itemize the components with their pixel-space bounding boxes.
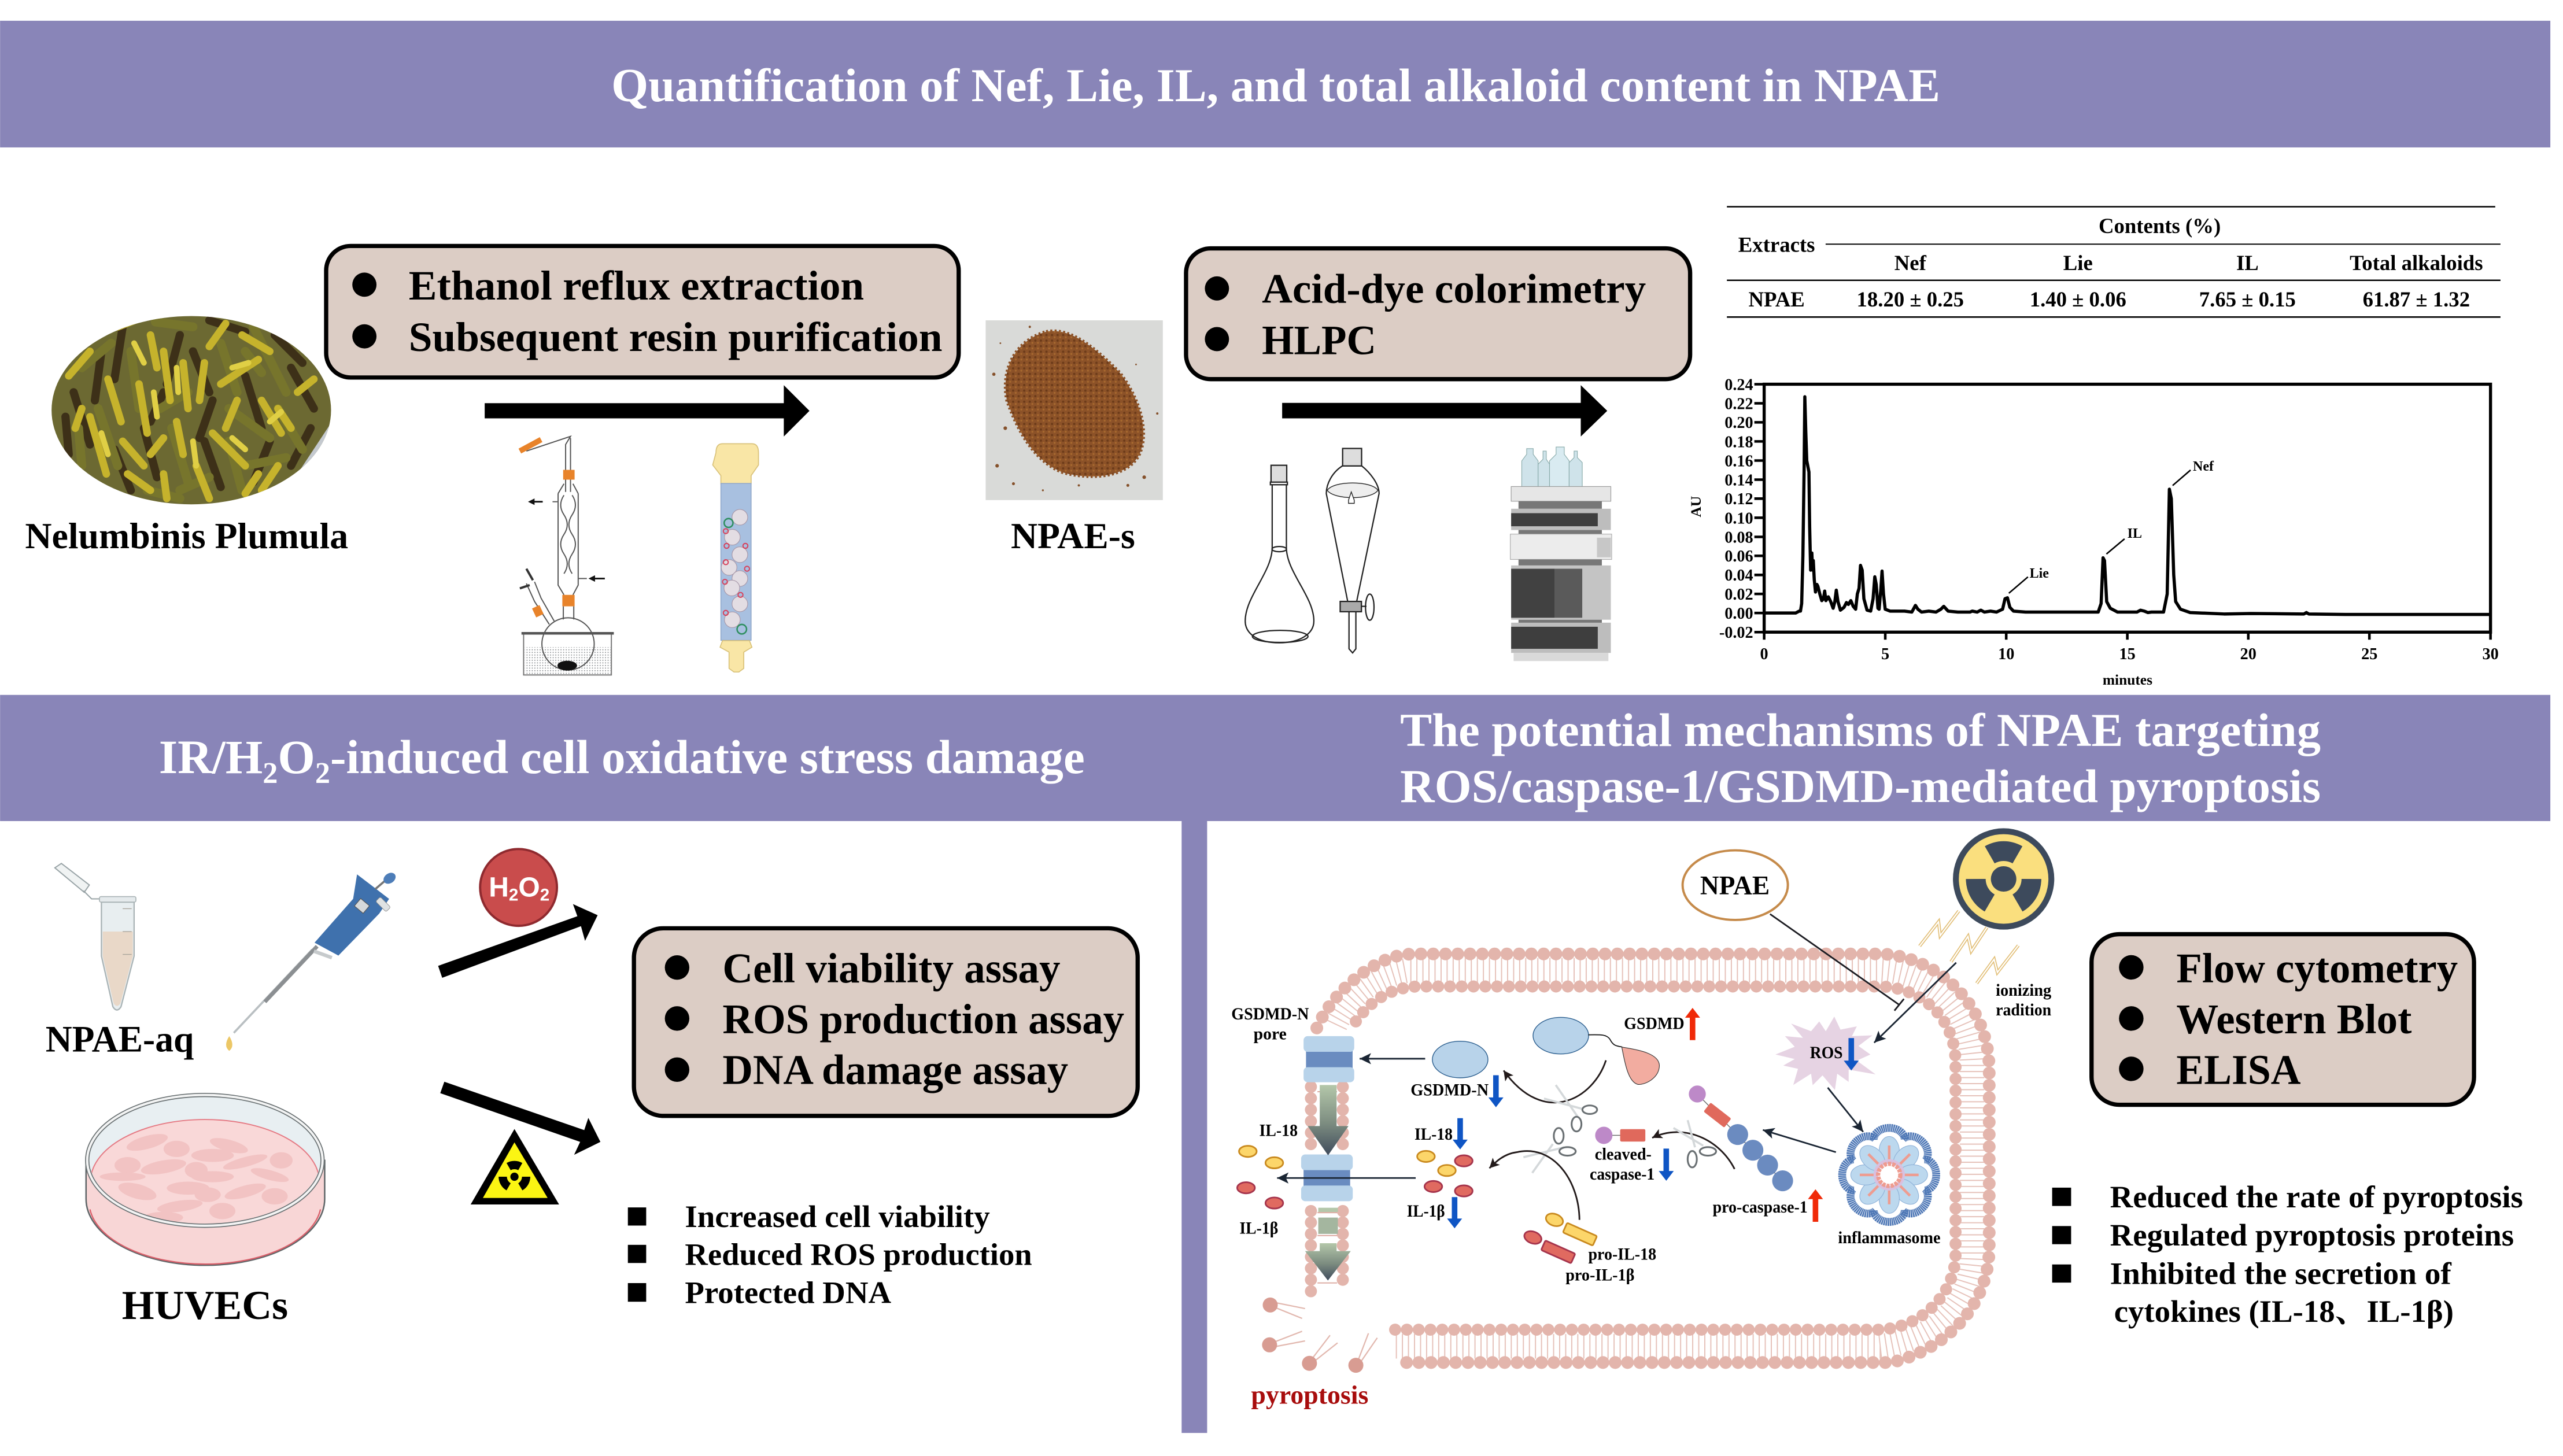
chart: HPLC chromatogram: 0.00 [1724, 605, 1753, 623]
header: cell oxidative stress and mechanisms: 2 [263, 756, 278, 790]
panel: extraction methods: Subsequent resin purification [409, 314, 943, 360]
text block: oxidative stress results: Increased cell viability [685, 1199, 990, 1234]
arrow: radiation to ROS [1874, 963, 1956, 1043]
chart: HPLC chromatogram: 0 [1760, 645, 1768, 663]
arrow: cleavage of GSDMD [1504, 1060, 1606, 1103]
cell membrane [1311, 954, 1989, 1362]
chart: HPLC chromatogram: 0.20 [1724, 414, 1753, 432]
chart: HPLC chromatogram: 20 [2240, 645, 2257, 663]
chart: HPLC chromatogram: 10 [1998, 645, 2014, 663]
chart: HPLC chromatogram: Lie [2030, 566, 2049, 581]
text block: oxidative stress results [628, 1199, 1032, 1310]
divider bar [1181, 821, 1207, 1433]
panel: analysis methods: HLPC [1262, 317, 1376, 363]
GSDMD-N pore upper [1303, 1036, 1354, 1082]
text block: oxidative stress results: Reduced ROS production [685, 1237, 1032, 1272]
label: GSDMD-N pore: pore [1254, 1025, 1287, 1043]
chart: HPLC chromatogram: 0.04 [1724, 567, 1753, 585]
inflammasome [1842, 1128, 1936, 1222]
icon: H2O2 [480, 849, 557, 926]
chart: HPLC chromatogram: 0.18 [1724, 433, 1753, 451]
label: IL-18 with down arrow [1415, 1118, 1468, 1150]
chart: HPLC chromatogram: AU [1687, 496, 1704, 518]
arrow: ROS to inflammasome [1828, 1088, 1863, 1132]
icon: microtube NPAE-aq [55, 863, 136, 1010]
panel: assays [634, 928, 1138, 1116]
label: ionizing radition: ionizing [1996, 981, 2051, 1000]
text block: mechanism results: cytokines (IL-18、IL-1β) [2114, 1294, 2454, 1329]
arrow: powder to analysis [1282, 385, 1607, 437]
arrow: extraction to powder [485, 385, 810, 437]
diagram: pyroptosis mechanism [1231, 828, 2054, 1409]
ROS burst [1775, 1017, 1875, 1090]
chart: HPLC chromatogram: 0.22 [1724, 395, 1753, 413]
label: IL-1β with down arrow: IL-1β [1407, 1202, 1445, 1221]
cytokines inside [1417, 1151, 1472, 1196]
arrow: cytokine release [1277, 1177, 1416, 1178]
arrow: H2O2 to assays [438, 904, 597, 978]
chart: HPLC chromatogram: 0.10 [1724, 509, 1753, 527]
table: contents: Lie [2063, 251, 2093, 275]
table: contents: Extracts [1738, 232, 1815, 256]
label: Nelumbinis Plumula: Nelumbinis Plumula [25, 515, 348, 556]
header: cell oxidative stress and mechanisms: -induced cell oxidative stress damage [330, 730, 1085, 784]
chart: HPLC chromatogram: 0.14 [1724, 471, 1753, 489]
cytokines outside [1237, 1146, 1283, 1209]
text block: oxidative stress results: Protected DNA [685, 1276, 891, 1310]
text block: mechanism results: Regulated pyroptosis proteins [2110, 1218, 2514, 1252]
table: contents: Total alkaloids [2350, 251, 2483, 275]
label: cleaved-caspase-1 with down arrow: caspase-1 [1590, 1165, 1654, 1184]
chart: HPLC chromatogram: 0.06 [1724, 548, 1753, 566]
chart: HPLC chromatogram: 0.12 [1724, 490, 1753, 508]
label: GSDMD with up arrow: GSDMD [1624, 1014, 1685, 1033]
header: quantification: Quantification of Nef, Lie, IL, and total alkaloid content in NPAE [611, 59, 1940, 112]
panel: analysis methods: Acid-dye colorimetry [1262, 266, 1646, 312]
icon: scissors pro-IL [1523, 1128, 1576, 1173]
chart: HPLC chromatogram: 25 [2361, 645, 2377, 663]
inhibition line: NPAE to ROS [1770, 914, 1904, 1011]
icon: H2O2: H [489, 873, 509, 903]
table: contents [1727, 207, 2501, 317]
icon: pipette [226, 870, 398, 1051]
icon: reflux apparatus [520, 437, 614, 675]
panel: extraction methods: Ethanol reflux extraction [409, 263, 864, 309]
chart: HPLC chromatogram: minutes [2103, 671, 2152, 688]
header: cell oxidative stress and mechanisms: ROS/caspase-1/GSDMD-mediated pyroptosis [1400, 760, 2321, 812]
label: GSDMD-N with down arrow [1410, 1075, 1504, 1107]
photo: NPAE powder [985, 320, 1163, 500]
panel: assays: ROS production assay [722, 996, 1124, 1043]
label: pro-caspase-1 with up arrow: pro-caspase-1 [1713, 1198, 1808, 1217]
chart: HPLC chromatogram: 5 [1881, 645, 1889, 663]
label: GSDMD-N pore [1231, 1005, 1309, 1043]
icon: petri dish with HUVECs [86, 1095, 324, 1265]
label: cleaved-caspase-1 with down arrow: cleaved- [1595, 1145, 1652, 1163]
chart: HPLC chromatogram: IL [2128, 526, 2142, 541]
panel: detection methods: ELISA [2176, 1047, 2301, 1093]
icon: volumetric flask [1245, 465, 1314, 643]
chart: HPLC chromatogram: 0.02 [1724, 586, 1753, 604]
arrow: pro-caspase cleavage [1652, 1132, 1734, 1169]
panel: detection methods: Flow cytometry [2176, 945, 2458, 992]
header: quantification [0, 21, 2550, 147]
arrow: release through pore upper [1308, 1085, 1349, 1155]
arrow: GSDMD-N to pore [1360, 1058, 1425, 1059]
icon: separating funnel [1326, 449, 1379, 653]
label: HUVECs: HUVECs [122, 1283, 288, 1328]
label: IL-18 with down arrow: IL-18 [1415, 1125, 1453, 1144]
table: contents: 61.87 ± 1.32 [2363, 287, 2470, 311]
chart: HPLC chromatogram: Nef [2193, 459, 2214, 474]
table: contents: 1.40 ± 0.06 [2030, 287, 2126, 311]
panel: extraction methods [326, 246, 959, 378]
header: cell oxidative stress and mechanisms: 2 [315, 756, 330, 790]
GSDMD-N pore lower [1301, 1155, 1353, 1201]
panel: analysis methods [1186, 249, 1690, 379]
chart: HPLC chromatogram: 0.08 [1724, 529, 1753, 546]
text block: mechanism results [2052, 1180, 2523, 1329]
header: cell oxidative stress and mechanisms: The potential mechanisms of NPAE targeting [1400, 704, 2321, 756]
chart: HPLC chromatogram: 0.24 [1724, 376, 1753, 394]
label: IL-1β with down arrow [1407, 1197, 1462, 1228]
label: GSDMD-N pore: GSDMD-N [1231, 1005, 1309, 1023]
icon: H2O2: 2 [540, 886, 549, 905]
panel: detection methods [2092, 934, 2474, 1105]
chart: HPLC chromatogram [1687, 376, 2499, 688]
header: cell oxidative stress and mechanisms: IR/H [159, 730, 263, 784]
table: contents: Contents (%) [2099, 214, 2221, 238]
table: contents: 18.20 ± 0.25 [1857, 287, 1964, 311]
NPAE ellipse: NPAE [1700, 870, 1770, 900]
icon: radiation warning triangle [471, 1129, 559, 1204]
icon: resin column [712, 444, 759, 672]
label: NPAE-s: NPAE-s [1011, 515, 1135, 556]
icon: H2O2: O [518, 873, 540, 903]
label: ionizing radition [1996, 981, 2052, 1019]
table: contents: IL [2236, 251, 2259, 275]
ROS burst: ROS [1810, 1044, 1843, 1062]
table: contents: 7.65 ± 0.15 [2199, 287, 2296, 311]
photo: Nelumbinis Plumula [49, 311, 335, 510]
icon: lightning bolts [1919, 911, 2018, 984]
NPAE ellipse [1683, 851, 1788, 920]
label: IL-1β outside: IL-1β [1239, 1219, 1278, 1237]
label: pro-IL-1β: pro-IL-1β [1565, 1266, 1634, 1284]
icon: radiation source [1953, 828, 2054, 930]
arrow: release through pore lower [1305, 1208, 1351, 1280]
chart: HPLC chromatogram: 0.16 [1724, 452, 1753, 470]
table: contents: NPAE [1748, 287, 1805, 311]
arrow: radiation to assays [440, 1082, 600, 1155]
cleaved caspase-1 protein [1595, 1126, 1645, 1144]
label: pyroptosis: pyroptosis [1251, 1380, 1368, 1409]
label: GSDMD-N with down arrow: GSDMD-N [1410, 1081, 1489, 1100]
arrow: cleavage of pro-IL [1490, 1151, 1579, 1220]
chart: HPLC chromatogram: -0.02 [1719, 624, 1753, 642]
label: inflammasome: inflammasome [1838, 1229, 1941, 1247]
header: cell oxidative stress and mechanisms: O [278, 730, 315, 784]
label: NPAE-aq: NPAE-aq [46, 1018, 194, 1060]
chart: HPLC chromatogram: 30 [2483, 645, 2499, 663]
panel: assays: DNA damage assay [722, 1047, 1068, 1093]
table: contents: Nef [1894, 251, 1927, 275]
label: IL-18 outside: IL-18 [1260, 1121, 1298, 1140]
GSDMD-N protein [1432, 1041, 1488, 1078]
label: pro-IL-18: pro-IL-18 [1589, 1246, 1656, 1264]
chart: HPLC chromatogram: 15 [2119, 645, 2136, 663]
arrow: inflammasome to pro-caspase [1763, 1130, 1836, 1152]
panel: detection methods: Western Blot [2176, 996, 2412, 1043]
panel: assays: Cell viability assay [722, 945, 1061, 992]
label: pro-caspase-1 with up arrow [1713, 1189, 1823, 1222]
header: cell oxidative stress and mechanisms [0, 695, 2550, 821]
text block: mechanism results: Reduced the rate of pyroptosis [2110, 1180, 2523, 1214]
pro-IL-18 and pro-IL-1β proteins [1523, 1211, 1597, 1263]
icon: H2O2: 2 [509, 886, 518, 905]
icon: scissors GSDMD [1544, 1085, 1597, 1132]
GSDMD full-length protein [1533, 1017, 1659, 1084]
icon: scissors caspase [1674, 1120, 1716, 1167]
label: cleaved-caspase-1 with down arrow [1590, 1145, 1674, 1184]
icon: HPLC instrument [1511, 447, 1612, 661]
text block: mechanism results: Inhibited the secretion of [2110, 1256, 2452, 1291]
pro-caspase-1 protein [1689, 1085, 1793, 1191]
detached lipids [1262, 1298, 1377, 1373]
label: ionizing radition: radition [1996, 1001, 2052, 1019]
label: GSDMD with up arrow [1624, 1008, 1700, 1040]
